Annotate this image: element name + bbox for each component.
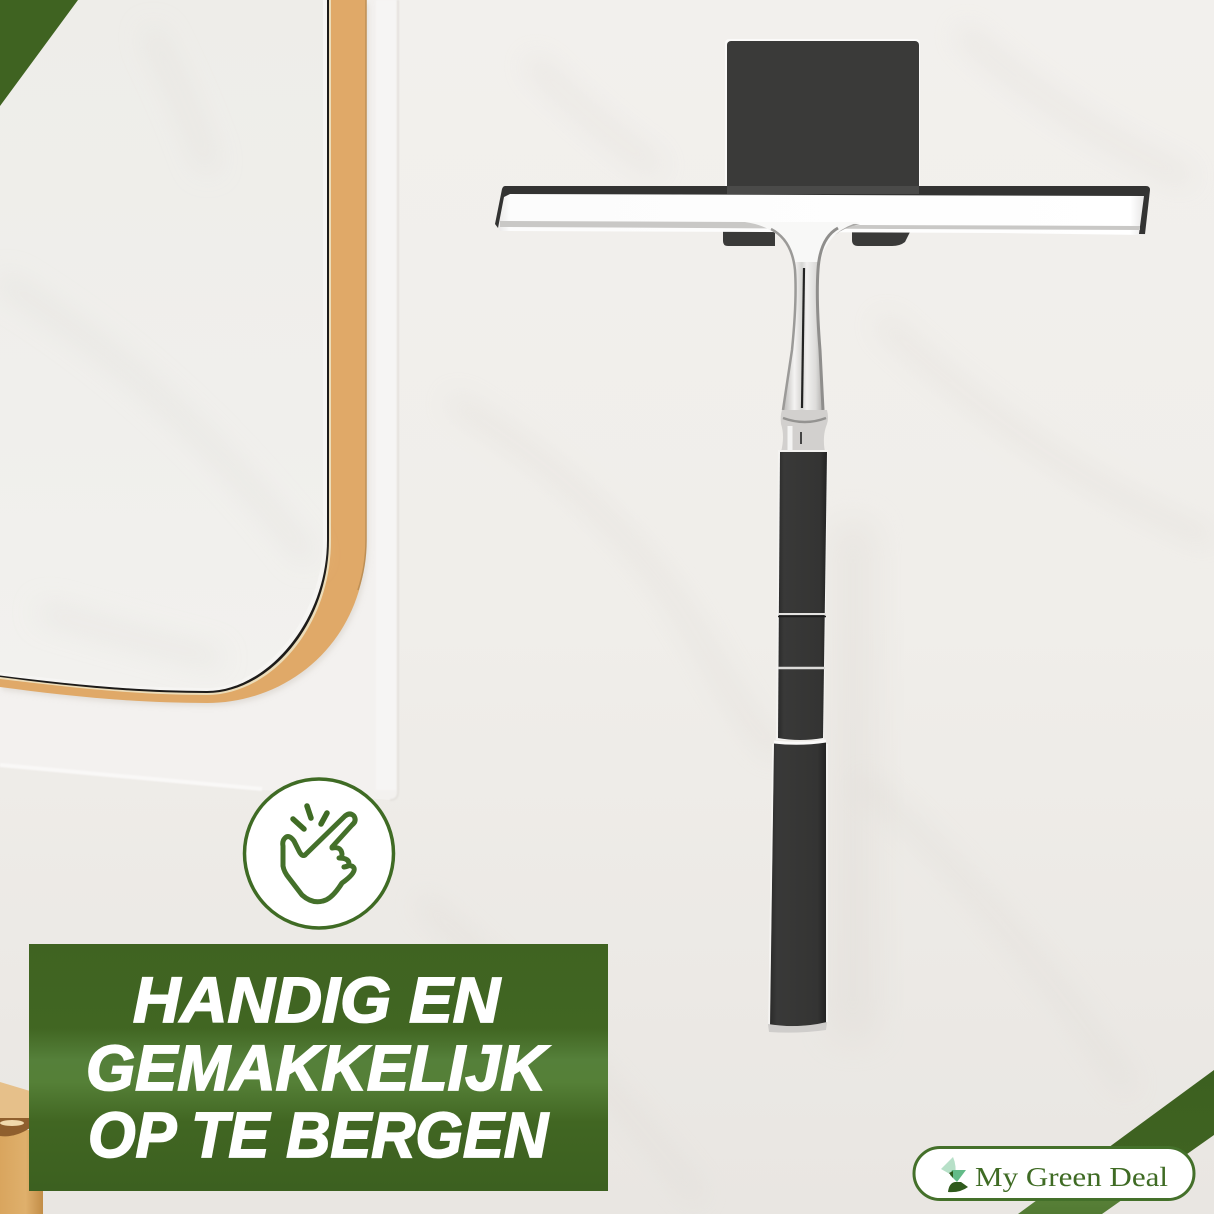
squeegee blade [495,186,1150,235]
green corner stripe: bottom right [1018,1070,1214,1214]
snap lines [293,806,327,829]
frame shadow [2,3,368,706]
product: squeegee on wall hook [495,39,1150,1033]
hook clips under blade [723,228,912,246]
chrome collar [781,410,828,452]
gold frame [0,0,366,703]
logo mark: leaves [941,1157,968,1192]
lower telescopic handle [768,741,827,1033]
upper telescopic handle [776,450,828,740]
brass fixture bottom left [0,1082,43,1214]
icon: snapping fingers in circle [244,779,394,928]
green corner triangle: top left [0,0,78,106]
headline text: OP TE BERGEN [88,1099,550,1171]
headline text: GEMAKKELIJK [86,1032,551,1104]
hand outline [283,814,355,902]
mirror with gold frame [0,0,368,706]
white wall panel behind mirror [0,0,398,800]
headline banner [29,944,608,1191]
squeegee neck: chrome T-joint [745,222,860,410]
logo text: My Green Deal [975,1161,1168,1192]
headline text: HANDIG EN [133,964,502,1036]
wall hook plate [725,39,920,191]
headline text [86,964,551,1171]
logo badge [914,1148,1194,1200]
